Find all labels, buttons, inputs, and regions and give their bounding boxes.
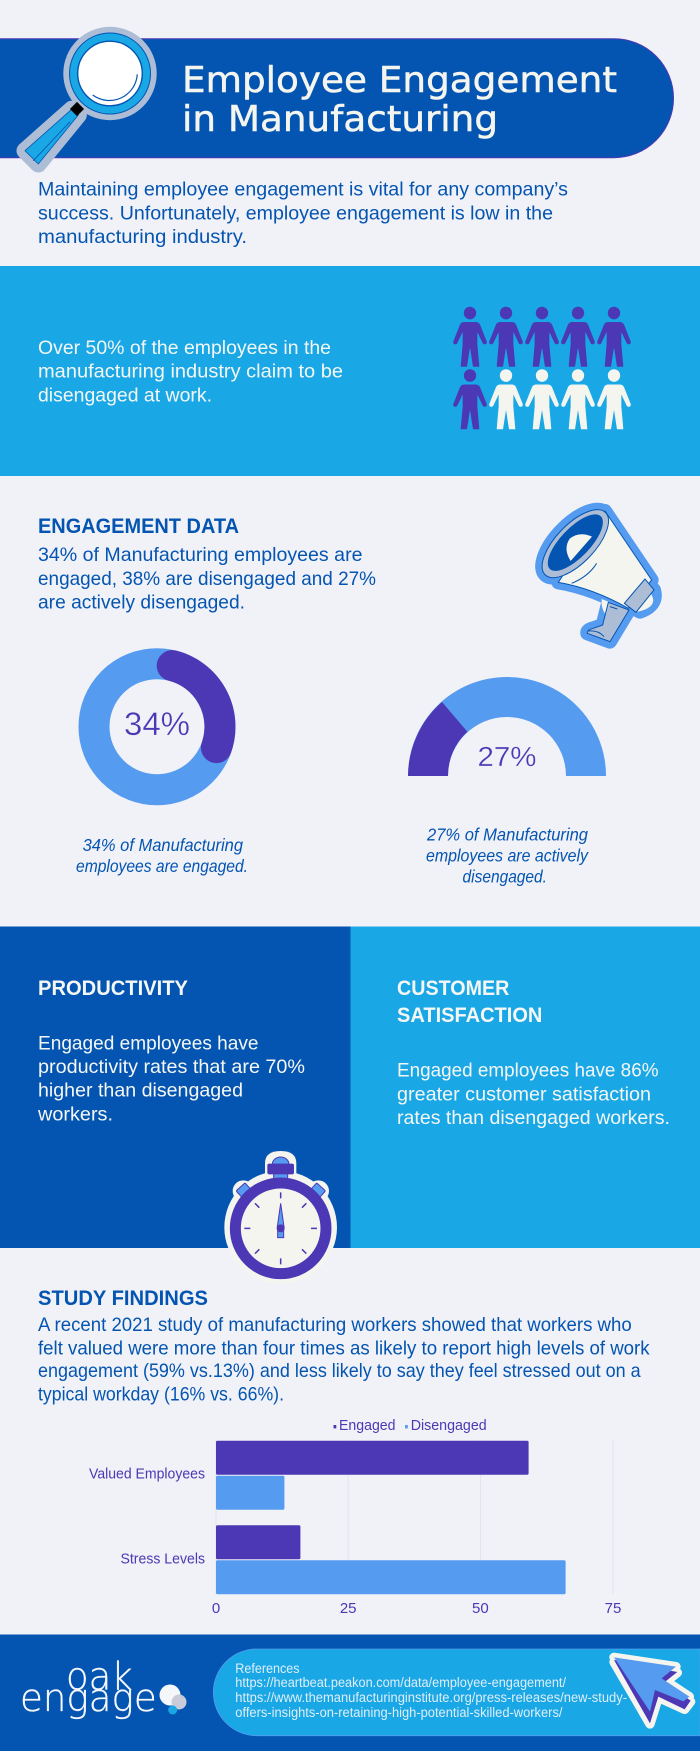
icon: stopwatch	[224, 1151, 337, 1284]
study text	[38, 1314, 650, 1406]
intro text: Maintaining employee engagement is vital for any company’s	[38, 179, 568, 201]
disengagement statement: manufacturing industry claim to be	[38, 361, 343, 383]
references text: References	[235, 1661, 300, 1676]
axis values: 25	[340, 1600, 357, 1617]
logo: oak engage: oak	[66, 1654, 133, 1698]
panel: customer satisfaction	[350, 926, 700, 1248]
heading: STUDY FINDINGS	[38, 1287, 208, 1310]
study text: felt valued were more than four times as likely to report high levels of work	[38, 1337, 650, 1359]
donut chart: 34%	[94, 664, 220, 790]
engagement summary: 34% of Manufacturing employees are	[38, 544, 362, 566]
logo: oak engage: engage	[20, 1676, 157, 1720]
engagement summary: are actively disengaged.	[38, 592, 245, 614]
disengagement statement: disengaged at work.	[38, 384, 212, 406]
references text	[235, 1661, 627, 1720]
footer	[0, 1634, 700, 1751]
header banner	[0, 27, 674, 164]
bar chart	[89, 1417, 621, 1617]
banner shape	[0, 39, 674, 158]
heading: SATISFACTION	[397, 1004, 542, 1027]
caption: 27% actively disengaged: 27% of Manufacturing	[426, 825, 588, 845]
donut chart: 34%: 34%	[124, 706, 190, 742]
category labels	[89, 1466, 205, 1567]
productivity text: productivity rates that are 70%	[38, 1056, 305, 1078]
heading: ENGAGEMENT DATA	[38, 515, 239, 538]
satisfaction text	[397, 1060, 670, 1129]
satisfaction text: rates than disengaged workers.	[397, 1107, 670, 1129]
panel: engagement data	[38, 499, 655, 887]
engagement summary: engaged, 38% are disengaged and 27%	[38, 568, 376, 590]
panel: disengaged employees	[0, 266, 700, 476]
satisfaction text: greater customer satisfaction	[397, 1083, 651, 1105]
intro text	[38, 179, 568, 248]
axis values: 0	[212, 1600, 220, 1617]
productivity text	[37, 1032, 305, 1126]
category labels: Valued Employees	[89, 1466, 205, 1483]
logo: oak engage	[20, 1654, 186, 1720]
panel: productivity	[0, 926, 350, 1248]
references text: https://www.themanufacturinginstitute.org/press-releases/new-study-	[235, 1690, 627, 1705]
disengagement statement	[38, 337, 343, 406]
satisfaction text: Engaged employees have 86%	[397, 1060, 658, 1082]
engagement summary	[38, 544, 376, 614]
productivity text: Engaged employees have	[38, 1032, 258, 1054]
caption: 34% engaged: employees are engaged.	[76, 856, 248, 876]
heading: CUSTOMER	[397, 977, 509, 1000]
pictogram: ten people	[453, 307, 631, 429]
title: in Manufacturing	[182, 99, 498, 140]
caption: 34% engaged: 34% of Manufacturing	[83, 835, 243, 855]
heading: PRODUCTIVITY	[38, 977, 188, 1000]
caption: 27% actively disengaged	[426, 825, 589, 887]
category labels: Stress Levels	[120, 1550, 205, 1567]
title: Employee Engagement	[182, 60, 617, 101]
productivity text: workers.	[37, 1104, 113, 1126]
study text: engagement (59% vs.13%) and less likely to say they feel stressed out on a	[38, 1360, 641, 1382]
intro text: manufacturing industry.	[38, 226, 247, 248]
caption: 27% actively disengaged: disengaged.	[462, 867, 547, 887]
heading	[397, 977, 542, 1027]
intro text: success. Unfortunately, employee engagement is low in the	[38, 202, 553, 224]
chart legend: Disengaged	[411, 1417, 487, 1434]
chart legend	[334, 1417, 487, 1434]
productivity text: higher than disengaged	[38, 1080, 243, 1102]
bars	[216, 1441, 566, 1594]
axis values: 50	[472, 1600, 489, 1617]
half donut chart: 27%: 27%	[478, 741, 536, 772]
axis values	[212, 1600, 621, 1617]
study text: A recent 2021 study of manufacturing workers showed that workers who	[38, 1314, 632, 1336]
icon: magnifying glass	[25, 27, 157, 164]
half donut chart: 27%	[408, 677, 606, 776]
title	[182, 60, 617, 140]
disengagement statement: Over 50% of the employees in the	[38, 337, 331, 359]
references text: https://heartbeat.peakon.com/data/employee-engagement/	[235, 1675, 566, 1690]
caption: 27% actively disengaged: employees are actively	[426, 846, 589, 866]
icon: cursor arrow	[614, 1657, 691, 1724]
study text: typical workday (16% vs. 66%).	[38, 1384, 284, 1406]
references pill	[213, 1649, 700, 1736]
chart legend: Engaged	[339, 1417, 396, 1434]
axis values: 75	[605, 1600, 621, 1617]
references text: offers-insights-on-retaining-high-potential-skilled-workers/	[235, 1705, 563, 1720]
icon: megaphone	[531, 499, 655, 642]
caption: 34% engaged	[76, 835, 248, 876]
panel: study findings	[38, 1287, 650, 1617]
